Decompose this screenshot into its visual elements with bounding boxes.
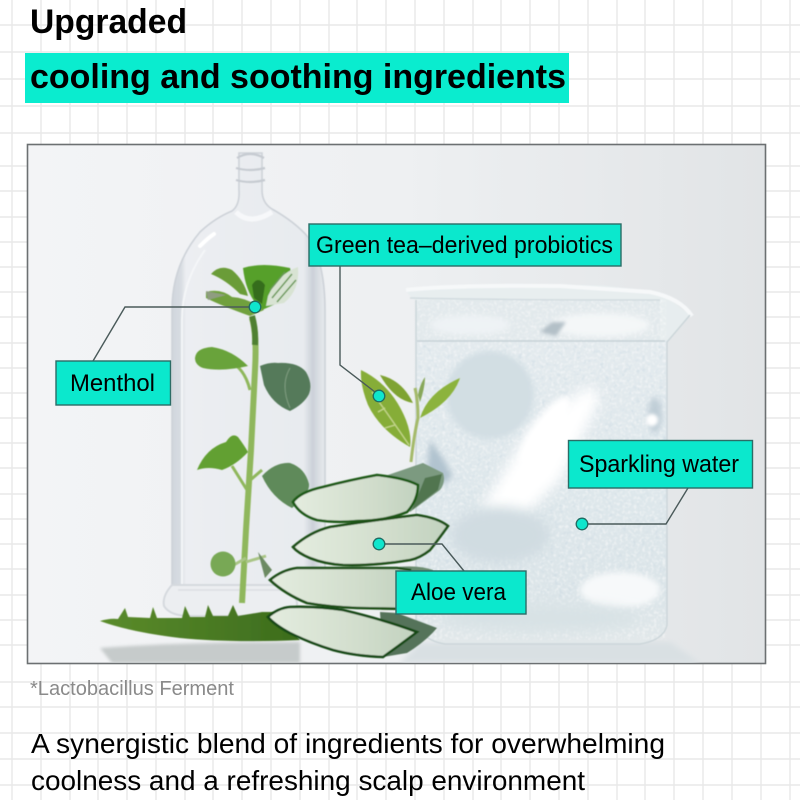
tea leaves: [361, 370, 460, 462]
mid leaves: [195, 347, 248, 370]
ice highlights: [425, 313, 662, 632]
label: aloe vera: [396, 571, 526, 614]
marker: aloe vera: [373, 538, 385, 550]
panel: ingredient photo: [28, 144, 766, 664]
marker: sparkling water: [576, 518, 588, 530]
title: [25, 3, 569, 103]
label: green tea-derived probiotics: Green tea–derived probiotics: [316, 232, 613, 259]
long aloe leaf: [100, 605, 300, 641]
marker: green tea: [373, 390, 385, 402]
slice 1: [293, 463, 444, 522]
beaker with ice water: [406, 285, 692, 644]
label: menthol: Menthol: [70, 370, 155, 397]
body text: A synergistic blend of ingredients for overwhelming: [31, 728, 665, 759]
body text: [31, 728, 665, 796]
footnote: *Lactobacillus Ferment: [30, 678, 234, 700]
body text: coolness and a refreshing scalp environment: [31, 765, 585, 796]
label: sparkling water: Sparkling water: [579, 451, 739, 478]
slice 3: [270, 566, 433, 612]
glass bell jar: [164, 153, 325, 616]
plant: [195, 265, 310, 603]
slice 4: [268, 607, 437, 657]
highlighted title line: cooling and soothing ingredients: [30, 58, 566, 96]
stem: [242, 318, 256, 603]
marker: menthol: [249, 301, 261, 313]
title: Upgraded: [30, 3, 187, 41]
floor shadows: [100, 642, 700, 663]
aloe slices: [268, 463, 448, 657]
slice 2: [293, 515, 448, 565]
callout lines: [93, 266, 688, 571]
label: sparkling water: [568, 440, 752, 488]
label: menthol: [56, 361, 170, 405]
label: aloe vera: Aloe vera: [411, 579, 507, 606]
label: green tea-derived probiotics: [309, 224, 621, 266]
top leaves: [211, 268, 248, 296]
